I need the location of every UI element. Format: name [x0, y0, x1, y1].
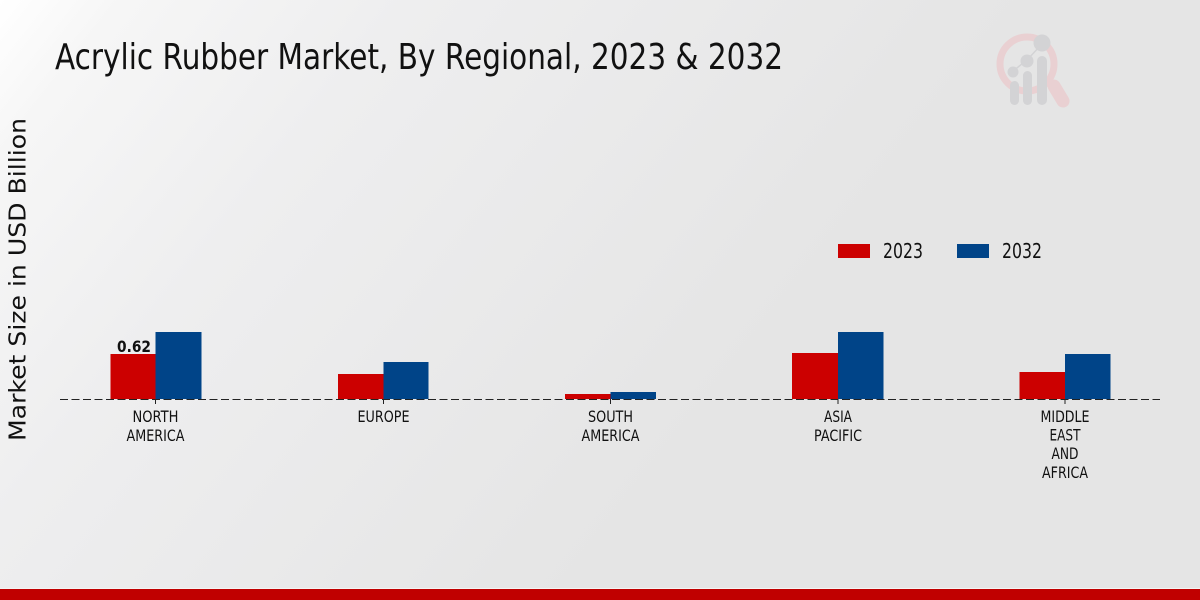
y axis label: Market Size in USD Billion [6, 118, 32, 441]
label: Middle East and Africa: MIDDLE [1040, 407, 1090, 426]
legend [838, 239, 1042, 263]
data label: 0.62: 0.62 [117, 337, 151, 356]
label: North America: AMERICA [126, 426, 185, 445]
bars: Middle East and Africa [1020, 354, 1110, 399]
label: South America: AMERICA [582, 426, 640, 445]
label: Europe: EUROPE [358, 407, 410, 426]
label: Middle East and Africa: EAST [1050, 426, 1081, 444]
bar chart [60, 332, 1160, 404]
title: Acrylic Rubber Market, By Regional, 2023 & 2032 [55, 37, 783, 78]
legend item: 2032 [957, 239, 1042, 263]
legend item: 2023 [838, 239, 923, 263]
label: North America: NORTH [132, 407, 178, 426]
bars: North America [110, 332, 202, 399]
bars: Asia Pacific [792, 332, 884, 399]
label: South America: SOUTH [588, 407, 633, 426]
legend item: 2023: 2023 [883, 239, 923, 263]
legend item: 2032: 2032 [1002, 239, 1042, 263]
label: Asia Pacific: PACIFIC [814, 426, 862, 445]
label: Asia Pacific: ASIA [824, 407, 852, 426]
bars: Europe [338, 362, 428, 399]
x axis labels [126, 407, 1090, 482]
icon: watermark logo [1000, 34, 1063, 105]
bars: South America [565, 392, 656, 399]
footer band [0, 588, 1200, 589]
label: Middle East and Africa: AFRICA [1042, 463, 1088, 482]
label: Middle East and Africa: AND [1052, 444, 1078, 463]
